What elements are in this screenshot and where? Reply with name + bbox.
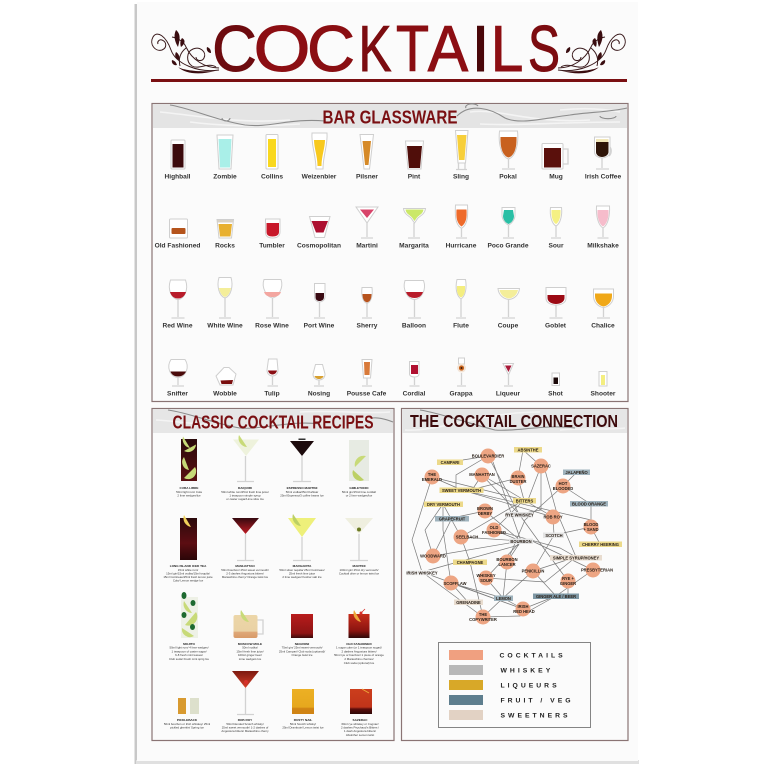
ingredient labels: SCOTCH: [545, 533, 563, 538]
glass: liqueur: [496, 364, 521, 398]
cocktail nodes: THE: [428, 472, 436, 477]
glass: pokal: [499, 131, 518, 180]
recipe: rob roy: 25ml sweet vermouth/ 1-2 dashes of: [222, 726, 268, 730]
recipe: negroni: 75ml gin/ 25ml sweet vermouth/: [282, 646, 323, 650]
glass: pilsner: Pilsner: [356, 174, 378, 180]
recipe: daiquiri: 1 teaspoon simple syrup: [229, 494, 261, 498]
glass: sherry: [357, 288, 378, 330]
ingredient labels: CAMPARI: [441, 460, 459, 465]
cocktail nodes: OLD: [490, 525, 498, 530]
cocktail nodes: THE: [479, 612, 487, 617]
recipe: rob roy: Angostura bitters/ Maraschino cherry: [221, 729, 269, 733]
cocktail nodes: WOODWARD: [420, 554, 446, 558]
glass: irish coffee: [585, 137, 621, 180]
recipe: rusty nail: 25ml Drambuie/ Lemon twist Ice: [282, 726, 324, 730]
legend: [438, 642, 590, 728]
recipe: old fashioned: Club soda (optional) Ice: [344, 661, 375, 665]
title: S: [528, 12, 560, 85]
ingredient labels: LEMON: [496, 596, 511, 601]
recipe: long island iced tea: 15ml gin/15ml vodka/15ml tequila/: [166, 572, 210, 576]
glass: pousse cafe: Pousse Cafe: [347, 390, 387, 398]
glass: tumbler: Tumbler: [259, 242, 285, 250]
ingredient labels: BLOOD ORANGE: [572, 502, 606, 506]
glass: hurricane: [446, 205, 477, 250]
cocktail nodes: + SAND: [583, 527, 599, 532]
glass: rose wine: Rose Wine: [255, 322, 289, 330]
ingredient labels: ABSINTHE: [518, 448, 539, 452]
cocktail nodes: PRESBYTERIAN: [581, 568, 613, 572]
glass: hurricane: Hurricane: [446, 242, 477, 250]
glass: rose wine: [255, 280, 289, 330]
recipe: mojito: MOJITO: [183, 642, 195, 646]
glass: cosmopolitan: [297, 216, 341, 250]
glass: wobble: Wobble: [213, 390, 237, 398]
legend: LIQUEURS: [500, 682, 560, 690]
cocktail nodes: HOT: [559, 481, 568, 486]
recipe: long island iced tea: LONG ISLAND ICED TEA: [170, 564, 207, 568]
glass: pousse cafe: [347, 360, 387, 398]
glass: milkshake: [587, 206, 619, 250]
ingredient labels: IRISH WHISKEY: [406, 570, 438, 576]
recipe: negroni: [279, 614, 325, 657]
legend: SWEETNERS: [500, 712, 571, 720]
glass: pokal: Pokal: [499, 174, 517, 180]
glass: snifter: [167, 360, 188, 398]
glass: shot: Shot: [548, 390, 564, 398]
recipe: moscow mule: Lime wedge/s Ice: [239, 657, 262, 661]
recipe: old fashioned: [334, 609, 384, 665]
recipe: martini: Cocktail olive or lemon twist Ice: [339, 572, 380, 576]
cocktail nodes: DUSTER: [510, 479, 526, 484]
ingredient labels: SIMPLE SYRUP/HONEY: [553, 556, 599, 560]
recipe: rob roy: [221, 671, 269, 733]
recipe: old fashioned: 50ml rye or bourbon/ 1 piece of orange: [334, 653, 384, 657]
recipe: margarita: [279, 514, 325, 579]
recipe: sazerac: 2 dashes Peychaud's Bitters /: [341, 726, 379, 730]
ingredient labels: SWEET VERMOUTH: [442, 488, 481, 493]
ingredient labels: GINGER ALE / BEER: [536, 594, 576, 599]
cocktail nodes: BOULEVARDIER: [472, 454, 504, 458]
recipe: gimlet: 50ml gin/15ml lime cordial/: [342, 490, 376, 494]
legend: WHISKEY: [500, 668, 553, 674]
glass: grappa: [449, 358, 473, 398]
ingredient labels: GRAPEFRUIT: [439, 516, 466, 522]
cocktail nodes: [420, 448, 613, 624]
recipe: espresso martini: 50ml vodka/25ml Kahlua/: [286, 490, 318, 494]
glass: shooter: [591, 372, 616, 398]
recipe: sazerac: [341, 689, 379, 737]
glass: red wine: [163, 280, 193, 330]
recipe: old fashioned: 1 sugar cube (or 1 teaspoon sugar)/: [336, 646, 382, 650]
recipe: moscow mule: MOSCOW MULE: [238, 642, 262, 646]
legend: FRUIT / VEG: [500, 698, 574, 704]
recipe: long island iced tea: 15ml Cointreau/25ml fresh lemon juice: [163, 575, 213, 579]
glass: zombie: Zombie: [213, 174, 237, 180]
ingredient labels: BOURBON: [510, 539, 532, 544]
recipe: pickleback: 50ml bourbon or Irish whiskey/ 25ml: [164, 722, 210, 726]
ingredient labels: CHAMPAGNE: [457, 560, 484, 565]
recipe: cuba libre: 2 lime wedges/Ice: [177, 494, 201, 498]
cocktail nodes: DERBY: [478, 511, 492, 516]
panel: bar glassware: [152, 104, 628, 402]
glass: red wine: Red Wine: [163, 322, 193, 330]
cocktail nodes: BROWN: [477, 506, 493, 511]
recipe: sazerac: Absinthe/ Lemon twist: [346, 733, 374, 737]
ingredient labels: JALAPEÑO: [565, 470, 588, 475]
glass: martini: Martini: [356, 242, 378, 250]
glass: wobble: [213, 368, 237, 398]
title: O: [254, 12, 310, 85]
title: C: [212, 12, 257, 85]
recipe: old fashioned: 2 Maraschino cherries/: [344, 657, 374, 661]
glass: milkshake: Milkshake: [587, 242, 619, 250]
heading: CLASSIC COCKTAIL RECIPES: [172, 412, 374, 432]
ingredient labels: [406, 447, 622, 605]
glass: port wine: [304, 284, 335, 330]
glass: margarita: [399, 208, 429, 250]
glass: white wine: White Wine: [207, 322, 243, 330]
title: T: [396, 12, 429, 85]
cocktail nodes: WHISKEY: [476, 573, 496, 578]
recipe: manhattan: Maraschino cherry/ Orange twist Ice: [222, 575, 269, 579]
recipe: cuba libre: 50ml light rum/ Cola: [176, 490, 202, 494]
glass: highball: Highball: [164, 174, 191, 180]
recipe: daiquiri: or caster sugar/Lime slice Ice: [226, 497, 264, 501]
recipe: manhattan: MANHATTAN: [235, 564, 255, 568]
recipe: gimlet: [342, 440, 376, 498]
icon: right flourish: [558, 30, 625, 73]
recipe: old fashioned: 2 dashes Angostura bitters/: [341, 649, 377, 653]
glass: rocks: Rocks: [215, 242, 235, 250]
recipe: mojito: [169, 592, 209, 661]
title: I: [471, 12, 490, 85]
glass: old fashioned: Old Fashioned: [155, 242, 200, 250]
recipe: sazerac: 60ml rye whiskey or Cognac/: [341, 722, 379, 726]
glass: tulip: Tulip: [264, 390, 280, 398]
glass: goblet: [545, 288, 567, 330]
glass: highball: [164, 140, 191, 180]
glass: collins: Collins: [261, 174, 283, 180]
glass: pint: Pint: [408, 174, 421, 180]
title rule: [151, 79, 627, 82]
glass: irish coffee: Irish Coffee: [585, 174, 621, 180]
recipe: gimlet: GIMLETONIC: [349, 486, 369, 490]
recipe: negroni: 25ml Campari/ Club soda (optional)/: [279, 649, 325, 653]
recipe: sazerac: 1 dash Angostura bitters/: [344, 729, 376, 733]
recipe: rob roy: ROB ROY: [238, 718, 253, 722]
glass: sling: [453, 130, 469, 180]
panel: classic cocktail recipes: [152, 408, 394, 740]
glass: nosing: Nosing: [308, 390, 330, 398]
glass: sling: Sling: [453, 174, 469, 180]
glass: port wine: Port Wine: [304, 322, 335, 330]
recipe: mojito: Club soda/ Fresh mint sprig Ice: [169, 657, 209, 661]
recipe: cuba libre: CUBA LIBRE: [180, 486, 198, 490]
cocktail nodes: SEELBACH: [456, 534, 478, 540]
title: [212, 12, 560, 85]
cocktail nodes: SOUR: [480, 578, 492, 583]
glass: flute: [453, 280, 469, 330]
glass: shot: [548, 373, 564, 398]
recipe: manhattan: 2-3 dashes Angostura bitters/: [226, 572, 264, 576]
cocktail nodes: RED HEAD: [513, 609, 535, 614]
recipe: long island iced tea: 15ml white rum/: [178, 568, 198, 572]
recipe: moscow mule: 100ml ginger beer/: [238, 653, 262, 657]
glass: coupe: [498, 288, 520, 330]
recipe: manhattan: [221, 518, 269, 579]
network lines: [412, 450, 600, 617]
glass: sour: Sour: [548, 242, 564, 250]
recipe: long island iced tea: Cola/ Lemon wedge Ice: [173, 578, 204, 582]
glass: chalice: [591, 289, 615, 330]
recipe: rusty nail: [282, 689, 324, 730]
recipe: pickleback: pickled gherkin/ Spring ice: [170, 726, 204, 730]
glass: poco grande: [487, 208, 529, 250]
recipe: daiquiri: DAIQUIRI: [238, 486, 252, 490]
recipe: old fashioned: OLD FASHIONED: [346, 642, 372, 646]
glass: grappa: Grappa: [449, 390, 473, 398]
glass: tulip: [264, 359, 280, 398]
glass: cordial: Cordial: [403, 390, 426, 398]
glass: martini: [356, 207, 378, 250]
glass: sour: [548, 208, 564, 250]
recipe: pickleback: [164, 698, 210, 730]
recipe: daiquiri: [221, 435, 269, 501]
heading: BAR GLASSWARE: [322, 108, 458, 128]
recipe: espresso martini: ESPRESSO MARTINI: [287, 486, 318, 490]
title: L: [491, 12, 523, 85]
glass: liqueur: Liqueur: [496, 390, 521, 398]
glass: snifter: Snifter: [167, 390, 188, 398]
glass: goblet: Goblet: [545, 322, 567, 330]
glass: weizenbier: Weizenbier: [302, 174, 337, 180]
glass: flute: Flute: [453, 322, 469, 330]
cocktail nodes: BRAIN: [512, 474, 525, 479]
glass: cosmopolitan: Cosmopolitan: [297, 242, 341, 250]
recipe: daiquiri: 50ml white rum/25ml fresh lime juice/: [221, 490, 269, 494]
ingredient labels: BITTERS: [516, 498, 534, 504]
cocktail nodes: BLOODED: [553, 486, 573, 491]
glass: poco grande: Poco Grande: [487, 242, 529, 250]
recipe: rob roy: 50ml blended Scotch whisky/: [226, 722, 264, 726]
recipe: cuba libre: [176, 436, 202, 498]
glass: tumbler: [259, 219, 285, 250]
recipe: margarita: 2 lime wedges/ Kosher salt Ice: [282, 575, 322, 579]
cocktail nodes: LANCER: [498, 562, 516, 567]
recipe: martini: 100ml gin/ 25ml dry vermouth/: [340, 568, 379, 572]
title: A: [428, 12, 469, 85]
glass: mug: Mug: [549, 174, 563, 180]
recipe: rusty nail: RUSTY NAIL: [294, 718, 312, 722]
ingredient labels: RYE WHISKEY: [505, 512, 534, 518]
cocktail nodes: SAZERAC: [531, 464, 551, 468]
glass: shooter: Shooter: [591, 390, 616, 398]
legend: COCKTAILS: [500, 652, 566, 660]
glass: pint: [406, 141, 424, 180]
recipe: margarita: 25ml fresh lime juice: [289, 572, 316, 576]
cocktail nodes: BOURBON: [496, 557, 518, 562]
recipe: moscow mule: [234, 610, 264, 661]
recipe: moscow mule: 50ml vodka/: [242, 646, 258, 650]
recipe: espresso martini: [280, 438, 324, 498]
recipe: margarita: 50ml silver tequila/ 25ml Cointreau/: [279, 568, 325, 572]
heading: THE COCKTAIL CONNECTION: [410, 411, 618, 431]
glass: cordial: [403, 362, 426, 398]
cocktail nodes: PENICILLIN: [522, 568, 544, 574]
glass: rocks: [215, 220, 235, 250]
glass: balloon: Balloon: [402, 322, 426, 330]
glass: collins: [261, 134, 283, 180]
recipe: mojito: 50ml light rum/ 4 lime wedges/: [169, 646, 209, 650]
glass: nosing: [308, 364, 330, 398]
glass: weizenbier: [302, 133, 337, 180]
cocktail nodes: SCOFFLAW: [444, 581, 467, 586]
ingredient labels: GRENADINE: [456, 600, 481, 605]
glass: balloon: [402, 280, 426, 330]
cocktail nodes: RYE +: [562, 576, 575, 581]
recipe: negroni: NEGRONI: [295, 642, 309, 646]
recipe: gimlet: or 2 lime wedges/Ice: [346, 494, 373, 498]
glass: white wine: [207, 278, 243, 330]
glass: old fashioned: [155, 219, 200, 250]
panel: the cocktail connection: [402, 408, 628, 740]
recipe: rusty nail: 50ml Scotch whisky/: [290, 722, 316, 726]
glass: coupe: Coupe: [498, 322, 519, 330]
recipe: mojito: 1 teaspoon of caster sugar/: [171, 649, 207, 653]
glass: chalice: Chalice: [591, 322, 615, 330]
recipe: mojito: 6-8 fresh mint leaves/: [175, 653, 203, 657]
recipe: long island iced tea: [163, 515, 213, 582]
cocktail nodes: MANHATTAN: [469, 472, 495, 477]
ingredient labels: DRY VERMOUTH: [427, 502, 460, 507]
recipe: martini: MARTINI: [353, 564, 366, 568]
recipe: moscow mule: 15ml fresh lime juice/: [236, 649, 264, 653]
glass: pilsner: [356, 134, 378, 180]
icon: left flourish: [152, 30, 219, 73]
glass: mug: [542, 144, 568, 180]
recipe: sazerac: SAZERAC: [353, 718, 368, 722]
cocktail nodes: ROB ROY: [543, 514, 563, 520]
ingredient labels: CHERRY HEERING: [582, 542, 619, 547]
glass: sherry: Sherry: [357, 322, 378, 330]
glass: margarita: Margarita: [399, 242, 429, 250]
recipe: manhattan: 50ml bourbon/ 25ml sweet vermouth/: [221, 568, 269, 572]
title: C: [307, 12, 355, 85]
cocktail nodes: FASHIONED: [482, 530, 506, 535]
cocktail nodes: IRISH: [518, 604, 529, 609]
cocktail nodes: GINGER: [560, 581, 576, 586]
recipe: margarita: MARGARITA: [293, 564, 312, 568]
cocktail nodes: COPYWRITER: [469, 617, 497, 622]
cocktail nodes: EMERALD: [422, 477, 442, 482]
glass: zombie: [213, 135, 237, 180]
recipe: negroni: Orange twist Ice: [292, 653, 313, 657]
recipe: martini: [339, 518, 380, 576]
title: K: [358, 12, 392, 85]
recipe: pickleback: PICKLEBACK: [177, 718, 198, 722]
cocktail nodes: BLOOD: [584, 522, 598, 527]
recipe: espresso martini: 25ml Espresso/3 coffee beans Ice: [280, 494, 324, 498]
